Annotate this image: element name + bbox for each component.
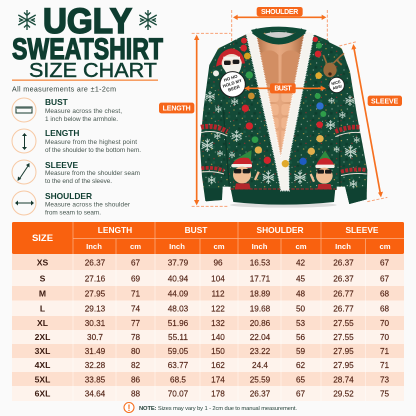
panel: measurement guide	[12, 97, 141, 216]
table header: LENGTH	[98, 225, 132, 235]
row 5XL: 33.85	[85, 376, 106, 384]
icon: warning	[124, 402, 134, 413]
table header: cm	[379, 242, 391, 251]
row 2XL: 78	[131, 333, 140, 342]
arrow: length: LENGTH	[163, 105, 191, 112]
row 3XL	[35, 346, 389, 356]
bust guide: Measure across the chest,	[45, 108, 122, 115]
row 5XL: 28.74	[333, 376, 354, 384]
footer note: NOTE: Sizes may vary by 1 - 2cm due to manual measurement.	[139, 406, 297, 412]
row 5XL: 65	[296, 376, 305, 384]
row 3XL: 59.05	[168, 347, 189, 356]
row 2XL: 30.7	[87, 333, 103, 342]
left elf	[231, 150, 259, 189]
hem ribbing	[231, 189, 335, 205]
size table	[12, 222, 404, 401]
speech bubble: nice abs: NICE	[331, 79, 342, 86]
speech bubble: ho ho hold my beer	[220, 72, 245, 97]
row 2XL: 140	[211, 333, 225, 342]
table header: SHOULDER	[256, 225, 304, 235]
row M: 112	[211, 290, 225, 298]
row 5XL: 73	[380, 376, 389, 384]
speech bubble: nice abs: ABS!	[332, 83, 343, 91]
row M: 48	[296, 290, 305, 298]
shirt under collar	[260, 32, 297, 43]
measurement guide lines	[192, 10, 387, 206]
row 4XL: 71	[380, 361, 389, 370]
row M: 71	[131, 290, 140, 298]
row XS: 26.37	[85, 258, 106, 268]
row 5XL: 86	[131, 376, 140, 384]
shoulder guide: from seam to seam.	[45, 210, 101, 216]
row L: 68	[380, 304, 389, 314]
table header	[12, 222, 404, 254]
row 6XL: 88	[131, 390, 140, 398]
left sleeve	[200, 39, 240, 201]
table header: SLEEVE	[345, 225, 379, 235]
row S: 104	[211, 274, 225, 284]
title: UGLY	[43, 2, 132, 41]
row 6XL: 178	[211, 390, 225, 398]
row M: 27.95	[85, 290, 106, 298]
arrow: sleeve: SLEEVE	[371, 98, 399, 105]
row 4XL: 63.77	[168, 361, 189, 370]
speech bubble: ho ho hold my beer: BEER	[227, 84, 241, 93]
arrow: bust: BUST	[274, 86, 292, 93]
row 4XL	[35, 360, 389, 370]
row M	[39, 288, 389, 298]
arrow: bust	[244, 83, 326, 93]
row 3XL: 23.22	[250, 347, 271, 356]
row 5XL: 25.59	[250, 376, 271, 384]
row 6XL: 75	[380, 390, 389, 398]
row 3XL: 71	[380, 347, 389, 356]
table header: cm	[213, 242, 225, 251]
row XS: 42	[296, 258, 305, 268]
speech bubble: ho ho hold my beer: HOLD MY	[222, 78, 243, 89]
row 6XL: 34.64	[85, 390, 106, 398]
sleeve divider shading	[223, 110, 340, 187]
icon: warning: !	[128, 403, 130, 413]
table header: Inch	[335, 242, 351, 251]
sleeve guide: to the end of the sleeve.	[45, 178, 112, 185]
row S: 67	[380, 274, 389, 284]
table header: SIZE	[32, 233, 53, 244]
arrow: length	[159, 35, 199, 205]
table header: Inch	[252, 242, 268, 251]
table row backgrounds	[12, 254, 404, 401]
sleeve guide: SLEEVE	[45, 160, 78, 170]
title: SWEATSHIRT	[12, 33, 163, 66]
fair isle bands	[201, 126, 367, 189]
row L: 74	[131, 304, 140, 314]
row L	[40, 304, 389, 314]
row 4XL: 4XL	[35, 360, 50, 370]
icon: snowflake right	[139, 10, 157, 30]
row XL	[37, 318, 389, 328]
row XS	[37, 258, 389, 268]
christmas lights	[240, 37, 326, 167]
row 6XL: 6XL	[35, 388, 50, 398]
row S: 26.37	[333, 274, 354, 284]
sweater shadow	[230, 202, 337, 208]
length guide	[12, 128, 141, 154]
row XL: 70	[380, 319, 389, 328]
santa	[213, 48, 245, 76]
left cuff	[204, 188, 223, 201]
row 6XL	[35, 388, 389, 398]
row 5XL: 174	[211, 376, 225, 384]
title: SIZE CHART	[29, 59, 158, 82]
row 2XL: 27.55	[333, 333, 354, 342]
row 6XL: 29.52	[333, 390, 354, 398]
bust guide	[12, 97, 122, 123]
row 3XL: 80	[131, 347, 140, 356]
length guide: of the shoulder to the bottom hem.	[45, 147, 141, 154]
sleeve guide	[12, 160, 140, 185]
arrow: sleeve	[351, 44, 402, 197]
row S: 17.71	[250, 274, 271, 284]
row M: 44.09	[168, 290, 189, 298]
snowflakes	[202, 91, 360, 188]
row XS: 67	[380, 258, 389, 268]
white fur trim	[246, 31, 314, 191]
row L: L	[40, 304, 45, 314]
icon: snowflake left	[18, 10, 36, 30]
right sleeve	[322, 39, 367, 204]
collar	[254, 31, 304, 41]
table header: Inch	[169, 242, 185, 251]
arrow: shoulder: SHOULDER	[261, 9, 298, 16]
row M: 26.77	[333, 290, 354, 298]
speech bubble: ho ho hold my beer: HO HO	[223, 73, 239, 83]
row 5XL: 5XL	[35, 374, 50, 384]
row 4XL: 162	[211, 361, 225, 370]
title	[12, 2, 163, 82]
bust guide: 1 inch below the armhole.	[45, 116, 118, 123]
row 3XL: 27.95	[333, 347, 354, 356]
row XL: 30.31	[85, 319, 106, 328]
row L: 26.77	[333, 304, 354, 314]
row 4XL: 27.95	[333, 361, 354, 370]
length guide: Measure from the highest point	[45, 139, 137, 146]
row 5XL: 68.5	[170, 376, 186, 384]
table header: cm	[130, 242, 141, 251]
sweater illustration with measurement arrows	[159, 7, 402, 208]
table header: cm	[295, 242, 307, 251]
row S: 40.94	[168, 274, 189, 284]
row L: 29.13	[85, 304, 106, 314]
row XL: 53	[296, 319, 305, 328]
row M: M	[39, 288, 46, 298]
shoulder guide: SHOULDER	[45, 191, 92, 201]
row S	[40, 274, 389, 284]
note: tolerance: All measurements are ±1-2cm	[12, 86, 116, 94]
row L: 50	[296, 304, 305, 314]
row 2XL	[35, 332, 389, 342]
row XL: 132	[211, 319, 225, 328]
row 4XL: 24.4	[252, 361, 268, 370]
right elf	[311, 151, 335, 189]
row 3XL: 3XL	[35, 346, 50, 356]
row 4XL: 32.28	[85, 361, 106, 370]
table header: BUST	[185, 225, 208, 235]
row 3XL: 59	[296, 347, 305, 356]
row 6XL: 70.07	[168, 390, 189, 398]
row M: 68	[380, 290, 389, 298]
row XS: 67	[131, 258, 140, 268]
row S: S	[40, 274, 46, 284]
row XL: 77	[131, 319, 140, 328]
row S: 27.16	[85, 274, 106, 284]
row XL: 27.55	[333, 319, 354, 328]
table header: Inch	[86, 242, 102, 251]
right cuff	[346, 187, 367, 204]
row S: 45	[296, 274, 305, 284]
row 3XL: 150	[211, 347, 225, 356]
row M: 18.89	[250, 290, 271, 298]
row XS: 96	[213, 258, 223, 268]
arrow: shoulder	[233, 7, 326, 20]
row 4XL: 62	[296, 361, 305, 370]
shoulder guide: Measure across the shoulder	[45, 202, 131, 208]
chest and abs	[254, 33, 305, 158]
row 2XL: 70	[380, 333, 389, 342]
row 6XL: 26.37	[250, 390, 271, 398]
row XS: 16.53	[250, 258, 271, 268]
shoulder guide	[12, 191, 131, 216]
row 3XL: 31.49	[85, 347, 106, 356]
length guide: LENGTH	[45, 128, 79, 138]
row L: 122	[211, 304, 225, 314]
sleeve guide: Measure from the shoulder seam	[45, 170, 140, 177]
row XS: XS	[37, 258, 48, 268]
reindeer	[323, 53, 344, 77]
row XL: 51.96	[168, 319, 189, 328]
row 5XL	[35, 374, 389, 384]
bust guide: BUST	[45, 97, 69, 107]
row XL: 20.86	[250, 319, 271, 328]
row 6XL: 67	[296, 390, 305, 398]
footer note	[124, 402, 297, 413]
row L: 19.68	[250, 304, 271, 314]
speech bubble: nice abs	[329, 77, 344, 93]
row 2XL: 55.11	[168, 333, 188, 342]
row L: 48.03	[168, 304, 189, 314]
row 2XL: 22.04	[250, 333, 271, 342]
row XS: 37.79	[168, 258, 189, 268]
row 2XL: 56	[296, 333, 305, 342]
row S: 69	[131, 274, 140, 284]
row 4XL: 82	[131, 361, 140, 370]
row 2XL: 2XL	[35, 332, 50, 342]
row XL: XL	[37, 318, 48, 328]
sweater body	[227, 31, 340, 190]
row XS: 26.37	[333, 258, 354, 268]
